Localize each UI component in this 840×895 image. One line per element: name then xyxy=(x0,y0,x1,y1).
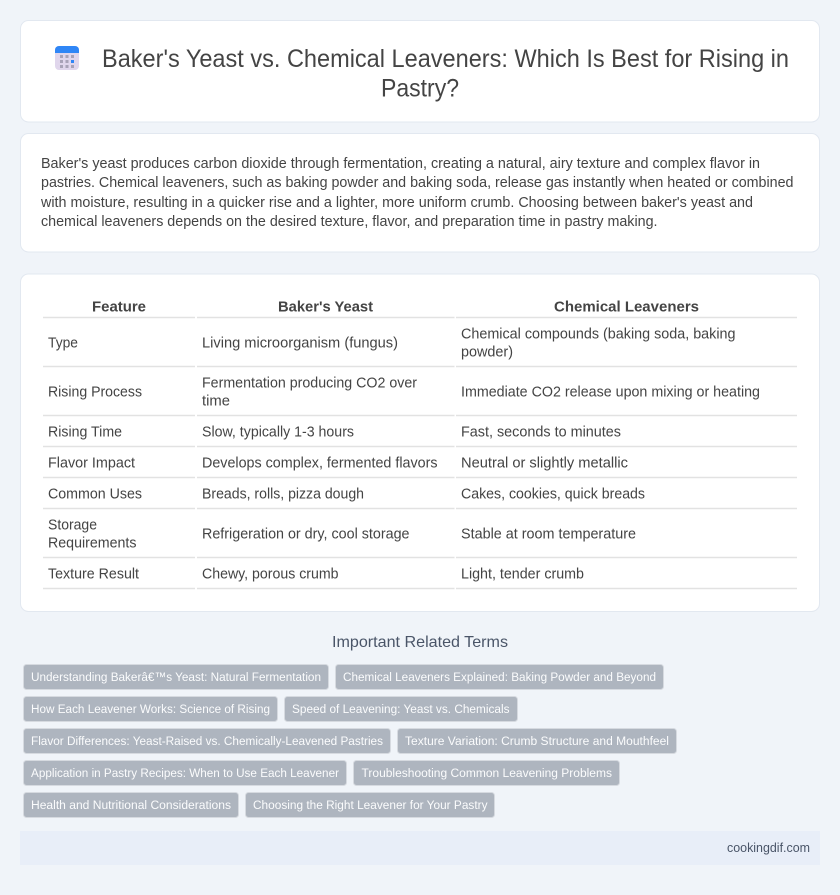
table header: Baker's Yeast xyxy=(278,298,373,316)
table header xyxy=(92,298,699,316)
table row: type: Chemical compounds (baking soda, baking xyxy=(461,326,736,342)
tag xyxy=(246,792,494,818)
title xyxy=(102,45,789,102)
table row: common uses: Breads, rolls, pizza dough xyxy=(202,486,364,502)
icon: calendar xyxy=(55,46,79,70)
table row: storage requirements xyxy=(48,518,636,552)
table row: common uses: Common Uses xyxy=(48,486,142,502)
table row: storage requirements: Storage xyxy=(48,518,97,534)
footer xyxy=(20,831,820,865)
table row: texture result: Light, tender crumb xyxy=(461,566,584,582)
tag xyxy=(284,696,518,722)
table row: rising time xyxy=(48,424,621,440)
table row: type: Living microorganism (fungus) xyxy=(202,336,398,352)
table row: texture result: Chewy, porous crumb xyxy=(202,566,338,582)
table row: flavor impact: Flavor Impact xyxy=(48,456,135,472)
text block: introduction xyxy=(40,156,793,230)
table row: flavor impact xyxy=(48,456,628,472)
table row: texture result xyxy=(48,566,584,582)
tag xyxy=(24,760,346,786)
table row: texture result: Texture Result xyxy=(48,566,139,582)
table row: rising process: Immediate CO2 release upon mixing or heating xyxy=(461,384,760,400)
tag: Chemical Leaveners Explained: Baking Powder and Beyond xyxy=(343,670,656,684)
title: Pastry? xyxy=(381,74,459,102)
table row: common uses xyxy=(48,486,645,502)
tag xyxy=(24,728,390,754)
panel: comparison table xyxy=(20,274,820,612)
title: Baker's Yeast vs. Chemical Leaveners: Which Is Best for Rising in xyxy=(102,45,789,73)
panel: introduction xyxy=(20,134,820,252)
panel: header xyxy=(20,20,820,122)
footer: cookingdif.com xyxy=(727,841,810,855)
table row: rising time: Slow, typically 1-3 hours xyxy=(202,424,354,440)
tag xyxy=(24,696,278,722)
table row: type: powder) xyxy=(461,344,513,360)
tag: How Each Leavener Works: Science of Rising xyxy=(31,702,270,716)
table row: rising process: time xyxy=(202,394,230,410)
table row: rising process xyxy=(48,376,760,410)
table row: storage requirements: Stable at room temperature xyxy=(461,526,636,542)
table row: rising process: Rising Process xyxy=(48,384,142,400)
tag: Texture Variation: Crumb Structure and Mouthfeel xyxy=(405,734,669,748)
table row: flavor impact: Neutral or slightly metallic xyxy=(461,456,628,472)
tag: Flavor Differences: Yeast-Raised vs. Chemically-Leavened Pastries xyxy=(31,734,383,748)
tag: Choosing the Right Leavener for Your Pastry xyxy=(253,798,488,812)
table row: storage requirements: Requirements xyxy=(48,536,136,552)
text block: introduction: pastries. Chemical leaveners, such as baking powder and baking soda, release gas instantly when heated or combined xyxy=(41,175,794,191)
table row: storage requirements: Refrigeration or dry, cool storage xyxy=(202,526,410,542)
tag: Health and Nutritional Considerations xyxy=(31,798,231,812)
tag: Understanding Bakerâ€™s Yeast: Natural Fermentation xyxy=(31,670,321,684)
table row: common uses: Cakes, cookies, quick breads xyxy=(461,486,645,502)
tag: Troubleshooting Common Leavening Problems xyxy=(362,766,612,780)
tag: Speed of Leavening: Yeast vs. Chemicals xyxy=(292,702,510,716)
table row: flavor impact: Develops complex, fermented flavors xyxy=(202,456,438,472)
tag xyxy=(24,792,238,818)
heading: related terms: Important Related Terms xyxy=(332,634,508,651)
table row: rising time: Rising Time xyxy=(48,424,122,440)
table row: type xyxy=(48,326,736,360)
table row: rising process: Fermentation producing CO2 over xyxy=(202,376,417,392)
text block: introduction: Baker's yeast produces carbon dioxide through fermentation, creating a natural, airy texture and complex flavor in xyxy=(41,156,760,172)
tag xyxy=(354,760,620,786)
tag xyxy=(398,728,676,754)
tag xyxy=(24,664,328,690)
table header: Feature xyxy=(92,298,146,316)
text block: introduction: with moisture, resulting in a quicker rise and a lighter, more uniform crumb. Choosing between baker's yeast and xyxy=(40,195,753,211)
text block: introduction: chemical leaveners depends on the desired texture, flavor, and preparation time in pastry making. xyxy=(41,214,658,230)
tag: Application in Pastry Recipes: When to Use Each Leavener xyxy=(31,766,339,780)
table row: rising time: Fast, seconds to minutes xyxy=(461,424,621,440)
table row: type: Type xyxy=(48,336,78,352)
table header: Chemical Leaveners xyxy=(554,298,699,316)
panel: related term tags xyxy=(24,664,676,818)
tag xyxy=(336,664,664,690)
